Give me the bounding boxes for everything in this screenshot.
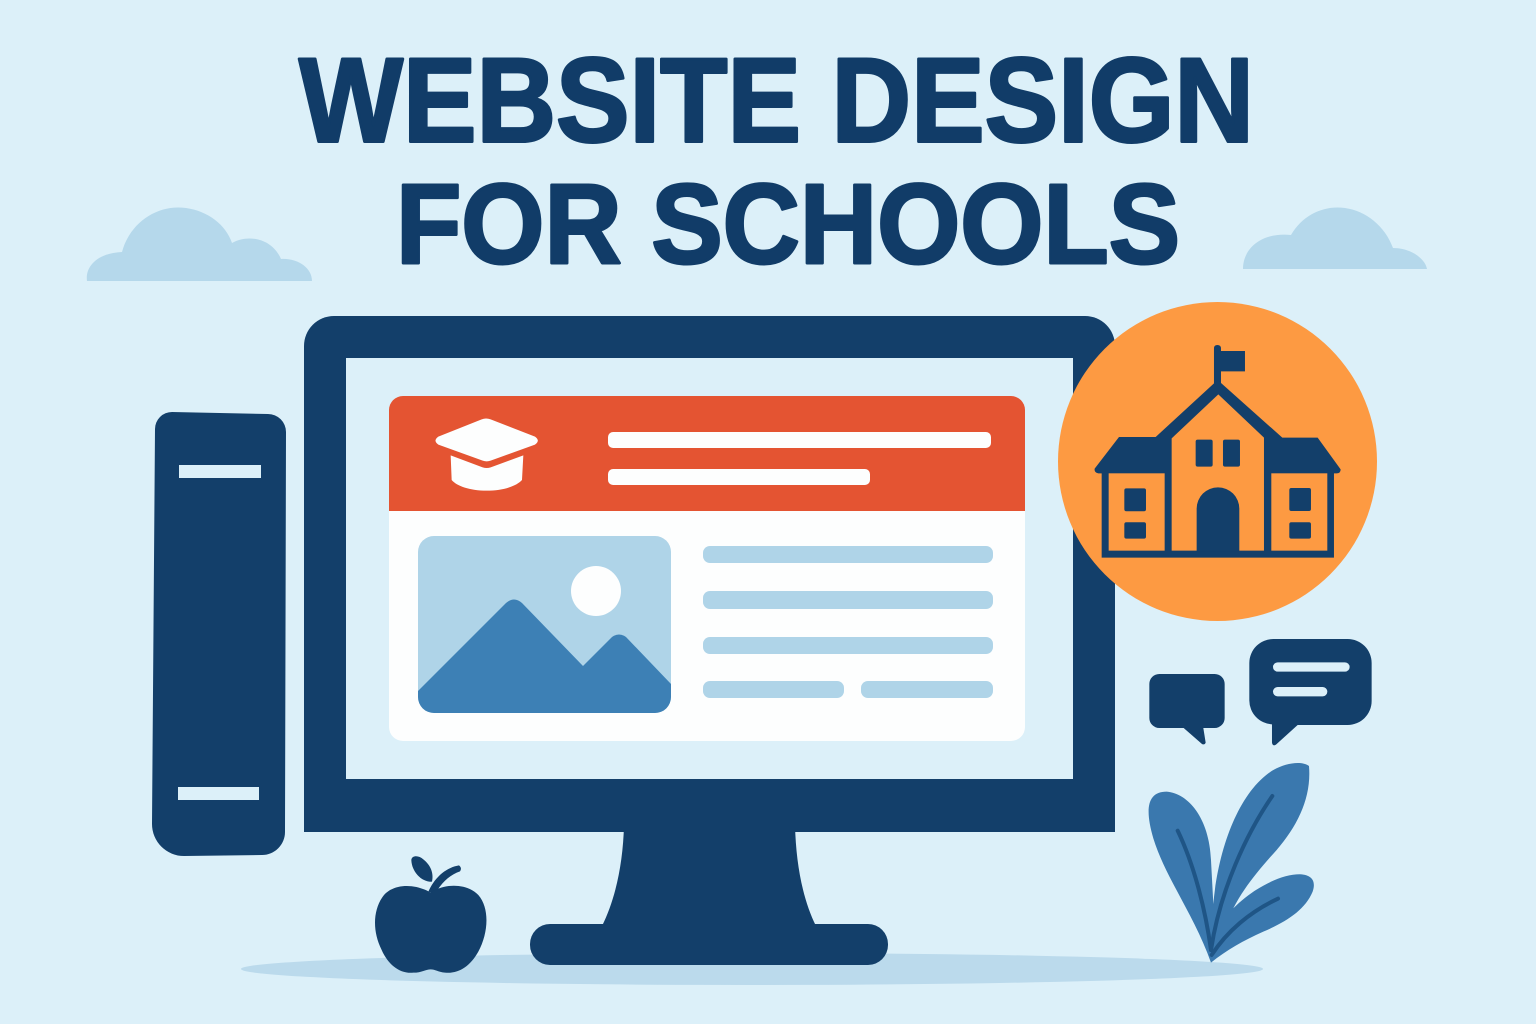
apple stem <box>428 865 461 894</box>
monitor <box>304 316 1115 965</box>
web page panel <box>389 396 1025 741</box>
tower slot: top <box>179 465 261 478</box>
sun <box>571 566 621 616</box>
computer tower <box>152 412 286 856</box>
icon: apple <box>375 856 486 973</box>
monitor frame <box>304 316 1115 832</box>
ground shadow <box>241 953 1263 985</box>
icon: graduation cap <box>435 418 538 491</box>
header title line <box>608 432 991 448</box>
plant veins <box>1178 796 1278 955</box>
title: FOR SCHOOLS <box>396 161 1180 287</box>
icon: school building <box>1095 345 1341 558</box>
monitor screen <box>346 358 1073 779</box>
web page header <box>389 396 1025 511</box>
header subtitle line <box>608 469 870 485</box>
apple leaf <box>411 856 433 882</box>
cloud: right <box>1243 207 1427 269</box>
flag <box>1214 345 1245 385</box>
apple body <box>375 886 486 973</box>
monitor stand <box>602 825 816 926</box>
wall panels <box>1109 394 1327 551</box>
monitor base <box>530 924 888 965</box>
title <box>299 34 1254 287</box>
speech bubbles and plant <box>1149 639 1372 963</box>
title: WEBSITE DESIGN <box>299 34 1254 168</box>
speech bubble: large <box>1249 639 1372 745</box>
plant <box>1149 763 1314 963</box>
school badge <box>1058 302 1377 621</box>
plant leaves <box>1149 763 1314 963</box>
windows and door <box>1124 440 1311 552</box>
text lines <box>703 546 993 698</box>
image placeholder <box>418 536 671 713</box>
tower slot: bottom <box>178 787 259 800</box>
roof and walls <box>1095 380 1341 558</box>
cloud: left <box>87 207 312 281</box>
speech bubble: small <box>1149 674 1225 744</box>
mountains <box>418 600 671 713</box>
